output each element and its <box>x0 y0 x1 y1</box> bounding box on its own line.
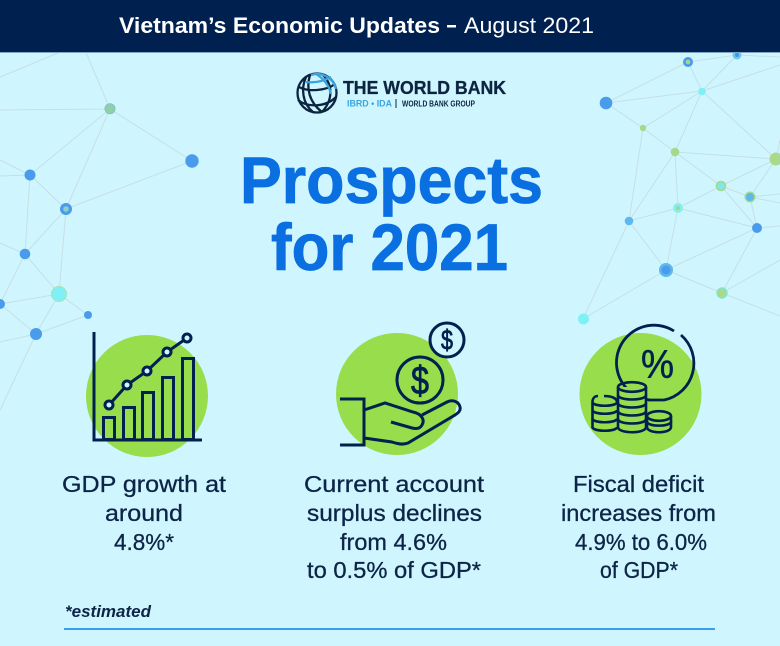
icon: hand with coins <box>336 323 464 455</box>
header bar: Vietnam’s Economic Updates <box>119 13 440 38</box>
World Bank logo: WORLD BANK GROUP <box>402 100 476 108</box>
text: GDP growth: around <box>105 500 183 526</box>
network decoration: right <box>578 50 780 324</box>
icon: percent and coin stacks <box>580 325 702 455</box>
title: Prospects <box>240 143 543 217</box>
World Bank logo: THE WORLD BANK <box>343 78 506 98</box>
text: current account <box>304 471 485 583</box>
icon: globe <box>298 74 336 112</box>
text: current account: to 0.5% of GDP* <box>307 557 481 583</box>
World Bank logo <box>298 74 506 112</box>
text: GDP growth <box>62 471 227 555</box>
icon: hand with coins: $ <box>411 359 429 403</box>
footnote: *estimated <box>65 602 152 621</box>
icon: hand with coins: $ <box>441 324 453 356</box>
text: current account: from 4.6% <box>340 529 447 555</box>
coin stack: right <box>647 411 671 432</box>
text: fiscal deficit: of GDP* <box>600 557 678 583</box>
footer rule <box>64 628 715 630</box>
text: GDP growth: 4.8%* <box>114 529 174 555</box>
header bar <box>0 0 780 53</box>
title <box>240 143 543 284</box>
text: fiscal deficit: Fiscal deficit <box>573 471 705 497</box>
title: for 2021 <box>271 210 508 284</box>
coin stack: left <box>592 396 617 432</box>
icon: percent and coin stacks: % <box>641 343 674 387</box>
text: fiscal deficit: 4.9% to 6.0% <box>575 529 707 555</box>
text: current account: surplus declines <box>307 500 482 526</box>
text: current account: Current account <box>304 471 485 497</box>
World Bank logo: IBRD • IDA <box>347 98 392 110</box>
network decoration: left <box>0 50 199 410</box>
header bar: August 2021 <box>464 13 594 38</box>
icon: GDP growth chart <box>86 332 208 457</box>
coin stack: middle <box>618 382 646 432</box>
text: fiscal deficit: increases from <box>561 500 716 526</box>
text: GDP growth: GDP growth at <box>62 471 227 497</box>
text: fiscal deficit <box>561 471 716 583</box>
